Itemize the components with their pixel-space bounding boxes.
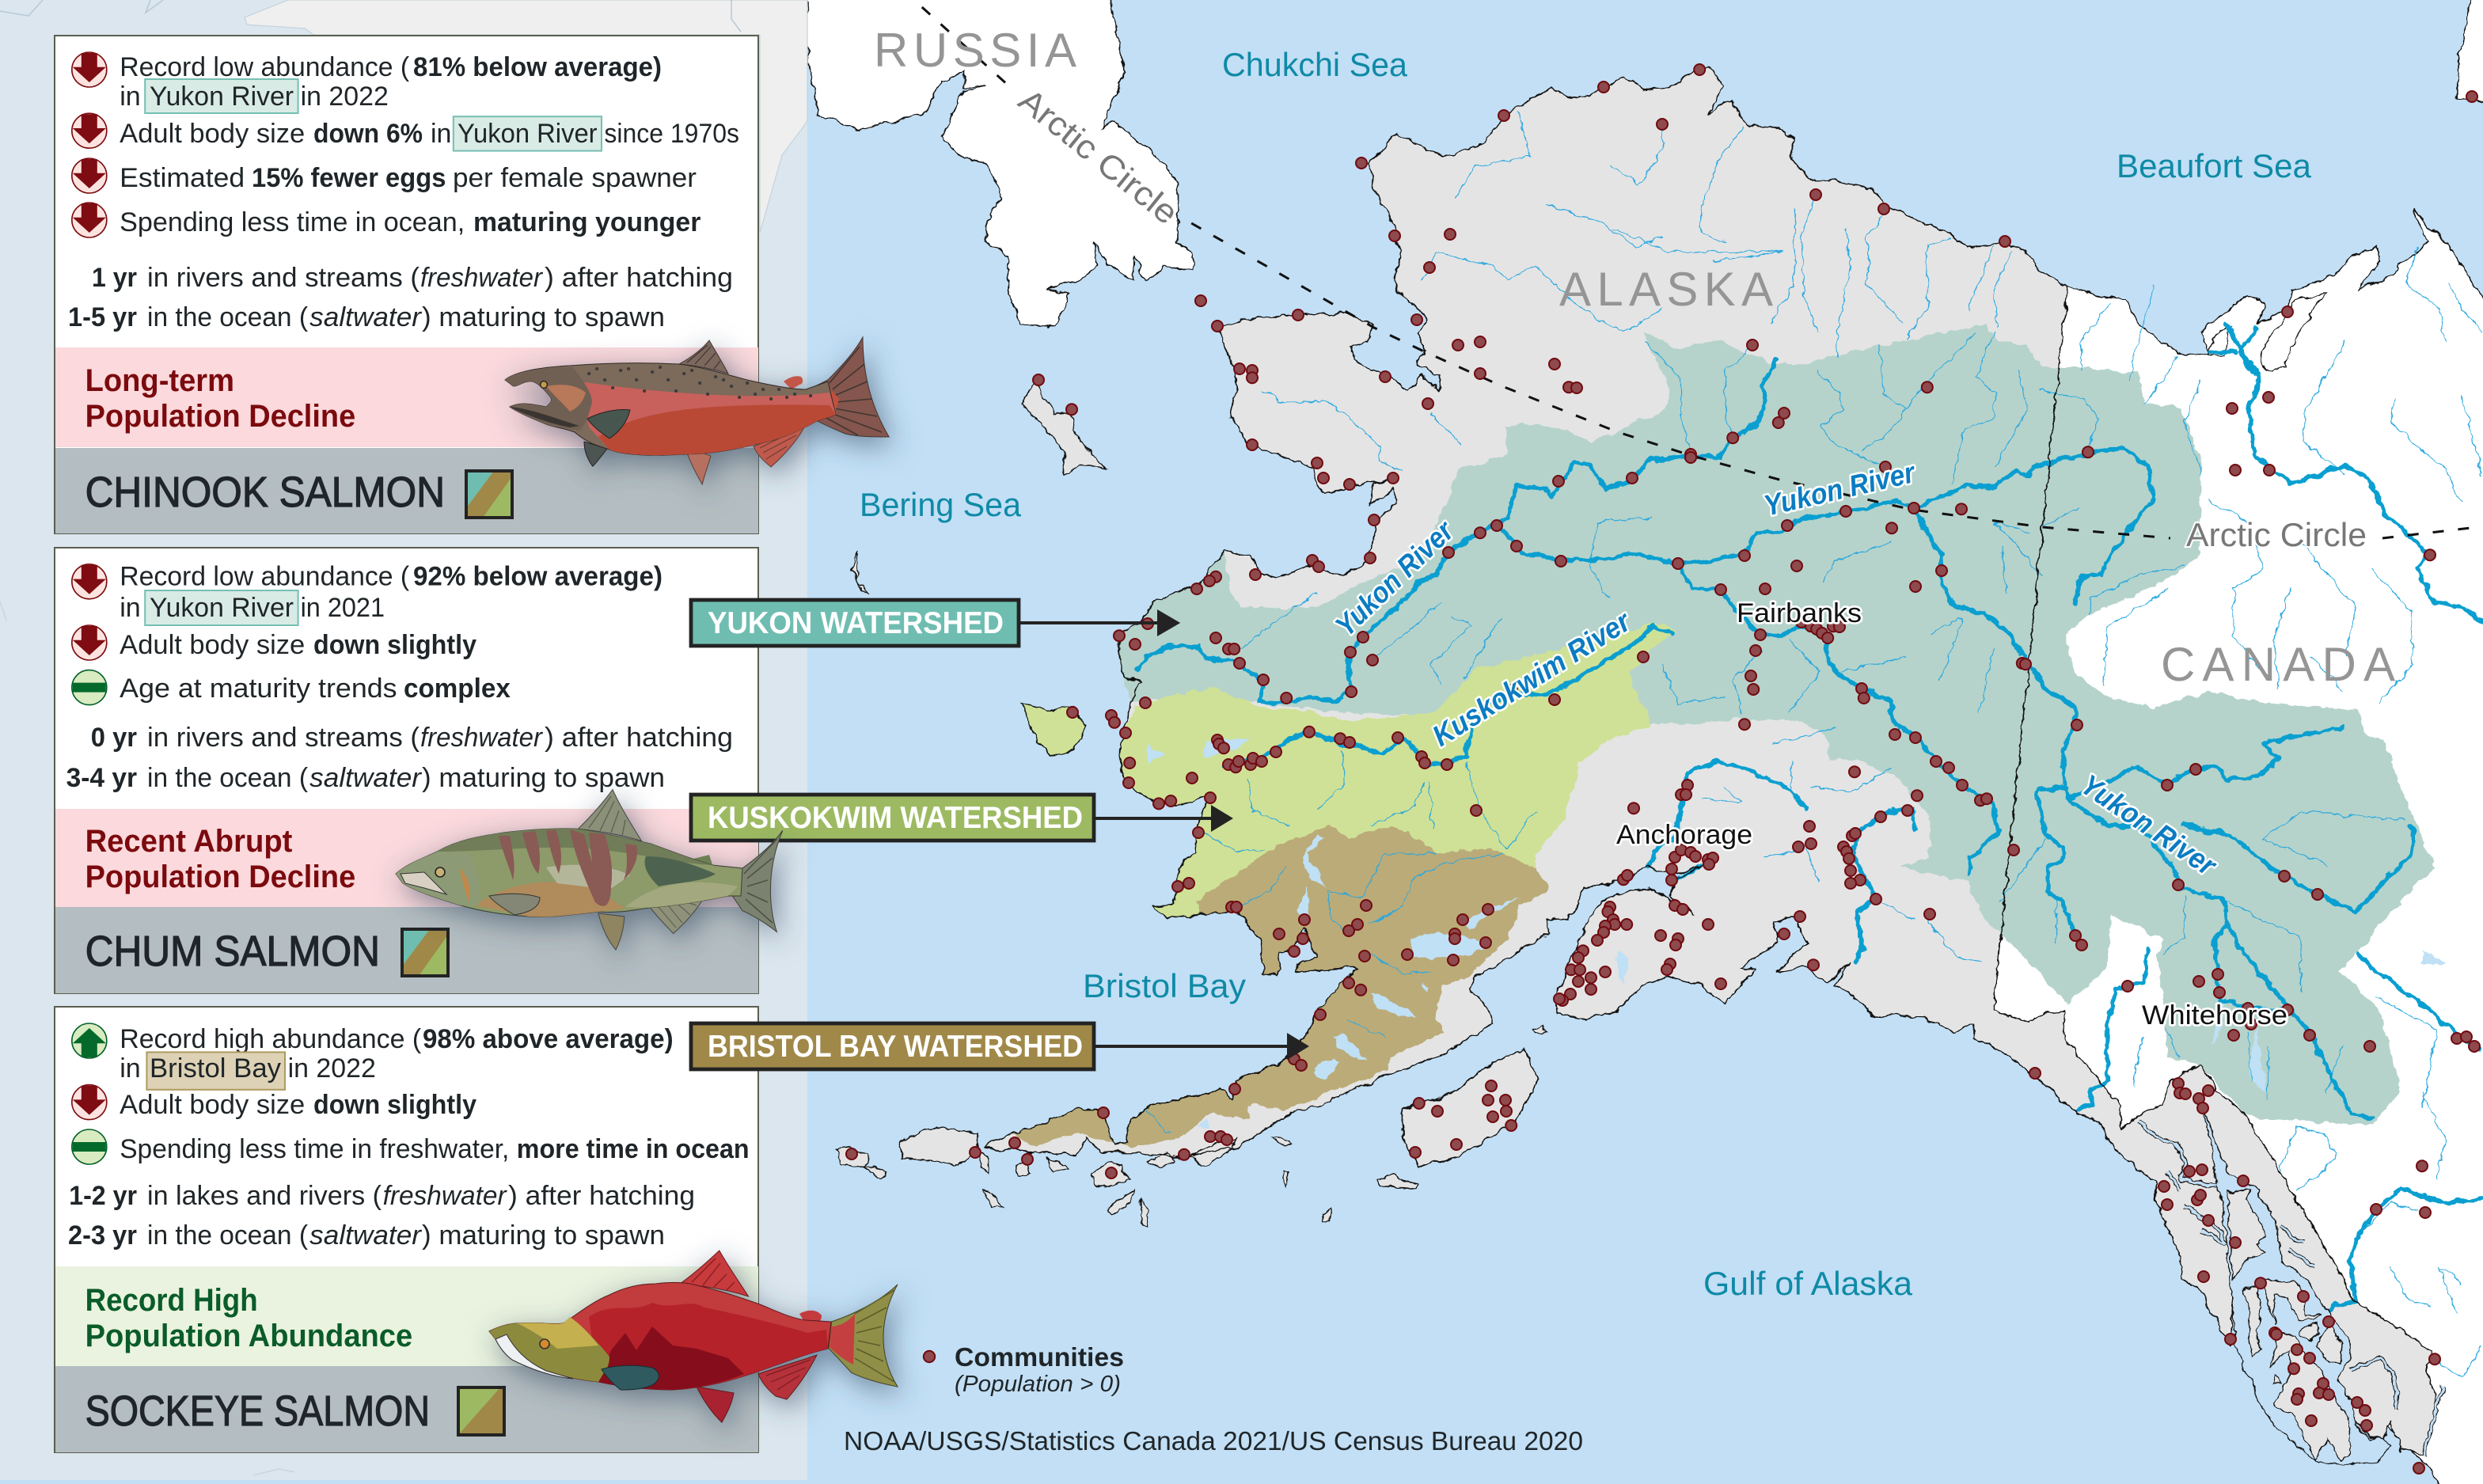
Panhandle narrow channels [2139, 1122, 2443, 1456]
Panhandle islands [2227, 1190, 2351, 1461]
name band [55, 448, 758, 533]
map: land and watersheds [807, 0, 2483, 1484]
text: life history: 3-4 yr [66, 763, 137, 793]
island: Trinity [1377, 1175, 1418, 1189]
text: abundance: Yukon River [150, 593, 294, 623]
text: body size: down slightly [313, 1090, 476, 1120]
text: abundance [120, 52, 662, 113]
text: life history: freshwater [383, 1181, 507, 1211]
text: body size: Adult body size [120, 119, 305, 149]
text: life history: in the ocean ( [147, 1220, 309, 1251]
text: life history: freshwater [420, 723, 544, 753]
label: Yukon watershed: YUKON WATERSHED [708, 606, 1004, 640]
text: life history: in the ocean ( [147, 763, 309, 793]
text: abundance: Record low abundance ( [120, 52, 410, 82]
label: Yukon River upper: Yukon River [2075, 769, 2223, 883]
text: life history: 1 yr [92, 263, 137, 293]
text: body size: in [431, 119, 451, 149]
head [489, 1317, 609, 1382]
label: Bristol Bay watershed: BRISTOL BAY WATERSHED [708, 1030, 1083, 1064]
rivers: Susitna and Copper [1648, 761, 1915, 961]
arrow: Yukon watershed [1019, 609, 1180, 636]
pelvic fin [685, 446, 711, 484]
text: life history: saltwater [309, 763, 423, 793]
text: body size: down slightly [313, 630, 476, 660]
status band: record high [55, 1266, 758, 1366]
label: Canada: CANADA [2161, 638, 2395, 691]
text: life history: 2-3 yr [68, 1220, 137, 1251]
icon: down arrow [72, 158, 107, 193]
fish: Sockeye salmon [489, 1251, 898, 1422]
lakes [1148, 738, 2446, 1130]
Arctic Circle dashed line [922, 7, 2483, 538]
text: abundance: in 2022 [288, 1053, 376, 1084]
label: Russia: RUSSIA [874, 24, 1076, 77]
icon: down arrow [72, 113, 107, 148]
body [396, 829, 742, 917]
text: life history: in the ocean ( [147, 302, 309, 332]
text: life history: freshwater [420, 263, 544, 293]
Alaska coastline [983, 66, 2436, 1461]
label: Kuskokwim watershed [691, 795, 1094, 841]
text: abundance: Yukon River [150, 82, 294, 112]
label: Chukchi Sea: Chukchi Sea [1222, 46, 1408, 83]
text: eggs [120, 163, 697, 193]
species name: SOCKEYE SALMON [85, 1387, 430, 1435]
Yukon watershed [1119, 325, 2435, 1124]
adipose fin [690, 855, 712, 864]
legend: communities: (Population > 0) [955, 1372, 1121, 1397]
text: body size: since 1970s [604, 119, 739, 149]
label: Kuskokwim watershed: KUSKOKWIM WATERSHED [708, 801, 1083, 835]
text: abundance: Record high abundance ( [120, 1024, 422, 1054]
status text: Population Decline [85, 860, 355, 894]
source credit: NOAA/USGS/Statistics Canada 2021/US Census Bureau 2020 [844, 1426, 1583, 1456]
rivers: Canada [2079, 323, 2483, 1312]
text: life history: saltwater [309, 1220, 423, 1251]
text: life history: ) after hatching [508, 1181, 695, 1211]
text: time in ocean: more time in ocean [517, 1134, 750, 1164]
text: maturity [120, 674, 511, 704]
anal fin [651, 895, 705, 933]
panel: Sockeye salmon [55, 1007, 758, 1452]
legend: communities: Communities [955, 1342, 1124, 1372]
head [505, 367, 592, 431]
status text: Recent Abrupt [85, 824, 292, 859]
flank patch [546, 865, 630, 890]
text: body size: down 6% [313, 119, 423, 149]
label: Arctic Circle along dashed line west: Arctic Circle [1012, 81, 1186, 232]
text: life history: 1-5 yr [68, 302, 137, 332]
rear dark patch [645, 856, 716, 886]
river: Yukon main stem [1136, 448, 2154, 702]
text: life history: in lakes and rivers ( [147, 1181, 382, 1211]
island: St Lawrence [1022, 380, 1105, 475]
status text: Record High [85, 1283, 258, 1318]
legend swatch: watersheds [458, 1387, 504, 1435]
legend swatch: watersheds [402, 929, 448, 976]
label: Beaufort Sea: Beaufort Sea [2117, 147, 2312, 184]
islands: Aleutian chain and Shumagin [836, 1024, 1547, 1227]
label: Anchorage: Anchorage [1616, 820, 1752, 850]
text: abundance: in 2021 [301, 593, 385, 623]
text: maturing [120, 207, 700, 237]
text: life history: in rivers and streams ( [147, 263, 420, 293]
name band [55, 1366, 758, 1452]
text: body size: Adult body size [120, 630, 305, 660]
island: St Matthew [852, 551, 869, 594]
text: life history: ) maturing to spawn [422, 1220, 665, 1251]
river: Tanana [1679, 564, 1999, 873]
dorsal fin [679, 340, 728, 374]
text: life history: ) maturing to spawn [422, 763, 665, 793]
label: Kuskokwim River: Kuskokwim River [1427, 604, 1638, 753]
ventral dark fin [584, 442, 607, 466]
text: abundance: in [120, 593, 141, 623]
species name: CHINOOK SALMON [85, 469, 445, 516]
panel: Chum salmon [55, 548, 758, 993]
tail [806, 337, 889, 437]
text: abundance: 98% above average) [423, 1024, 674, 1054]
status text: Population Decline [85, 399, 355, 434]
text: eggs: Estimated [120, 163, 245, 193]
text: eggs: 15% fewer eggs [252, 163, 446, 193]
river: Koyukuk [1497, 359, 1776, 524]
text: abundance: 92% below average) [413, 561, 663, 591]
text: abundance: in [120, 1053, 141, 1084]
text: maturity: complex [404, 674, 511, 704]
text: time in ocean [120, 1134, 750, 1164]
label: Whitehorse: Whitehorse [2142, 1000, 2287, 1030]
land: Russia [807, 0, 1194, 328]
text: life history: in rivers and streams ( [147, 723, 420, 753]
land: Canada [1993, 209, 2483, 1484]
text: abundance: Bristol Bay [150, 1053, 281, 1084]
tail [728, 830, 783, 932]
icon: down arrow [72, 1085, 107, 1120]
text: body size [120, 1090, 476, 1120]
island: Unimak [899, 1127, 978, 1165]
icon: down arrow [72, 625, 107, 660]
Bristol Bay watershed [1011, 825, 1550, 1148]
label: Yukon River middle: Yukon River [1761, 456, 1919, 522]
status text [85, 824, 355, 894]
text: body size [120, 630, 476, 660]
text: abundance [120, 1024, 674, 1090]
river: upper Yukon [1914, 508, 2415, 1118]
body [505, 363, 836, 455]
pectoral fin [489, 894, 540, 915]
pelvic fin [697, 1387, 734, 1422]
label: Yukon watershed [691, 600, 1019, 646]
label: Yukon River lower: Yukon River [1329, 514, 1461, 643]
Kuskokwim watershed [1119, 621, 1676, 918]
text: abundance: in 2022 [301, 82, 389, 112]
back shading [437, 829, 714, 865]
status band: recent abrupt decline [55, 809, 758, 907]
mid flank [589, 1303, 828, 1390]
spots [589, 367, 811, 399]
dorsal fin [579, 790, 642, 841]
text: body size [120, 116, 739, 151]
status text: Population Abundance [85, 1319, 412, 1353]
text: life history: ) maturing to spawn [422, 302, 665, 332]
species name: CHUM SALMON [85, 928, 380, 975]
head [396, 852, 480, 905]
island: Kodiak [1403, 1048, 1539, 1167]
text: abundance [120, 561, 663, 625]
pelvic fin [598, 913, 625, 950]
arrow: Kuskokwim watershed [1095, 805, 1233, 832]
pectoral fin [602, 1365, 659, 1390]
text: maturity: Age at maturity trends [120, 674, 397, 704]
land: Russia far-east island [2457, 0, 2483, 101]
adipose fin [799, 1311, 822, 1326]
stripes [499, 829, 612, 906]
text: eggs: per female spawner [453, 163, 697, 193]
text: body size: Adult body size [120, 1090, 305, 1120]
belly [475, 882, 625, 917]
text: life history [68, 1181, 695, 1251]
fish: Chinook salmon [505, 337, 889, 484]
icon: down arrow [72, 564, 107, 599]
land: Alaska [983, 66, 2436, 1461]
arrow: Bristol Bay watershed [1095, 1033, 1309, 1060]
Panhandle inside passage water [2204, 1113, 2390, 1464]
flank [579, 381, 836, 455]
text: abundance: Record low abundance ( [120, 561, 410, 591]
status text [85, 363, 355, 434]
legend swatch: watersheds [466, 471, 512, 518]
label: Bristol Bay: Bristol Bay [1083, 967, 1246, 1004]
label: Bristol Bay watershed [691, 1023, 1094, 1069]
icon: neutral bar [72, 670, 107, 705]
status band: long-term decline [55, 347, 758, 447]
pectoral fin [587, 409, 630, 438]
communities: dots [846, 64, 2480, 1474]
label: Fairbanks: Fairbanks [1737, 598, 1862, 628]
label: Arctic Circle east: Arctic Circle [2186, 516, 2367, 553]
text: maturing: Spending less time in ocean, [120, 207, 465, 237]
text: maturing: maturing younger [473, 207, 700, 237]
river network: small tributaries [1147, 114, 2482, 1377]
text: life history: 0 yr [91, 723, 137, 753]
label: Alaska: ALASKA [1559, 263, 1773, 316]
island: Nunivak [1022, 702, 1086, 754]
left strip background [0, 0, 807, 1480]
text: life history: ) after hatching [545, 723, 733, 753]
text: abundance: 81% below average) [413, 52, 662, 82]
text: life history [68, 263, 733, 332]
status text: Long-term [85, 363, 234, 398]
icon: down arrow [72, 52, 107, 87]
Mackenzie delta islands [2208, 293, 2327, 370]
US-Canada border [1993, 287, 2067, 1010]
text: life history: 1-2 yr [69, 1181, 137, 1211]
icon: neutral bar [72, 1129, 107, 1164]
dorsal fin [679, 1251, 749, 1296]
text: life history [66, 723, 733, 793]
text: life history: saltwater [309, 302, 423, 332]
text: body size: Yukon River [457, 119, 598, 149]
text: life history: ) after hatching [545, 263, 733, 293]
anal fin [754, 424, 806, 467]
text: abundance: in [120, 82, 141, 112]
icon: up arrow [72, 1023, 107, 1058]
anal fin [758, 1355, 817, 1399]
body [489, 1282, 831, 1390]
tail [829, 1285, 898, 1387]
status text [85, 1283, 412, 1353]
name band [55, 907, 758, 993]
fish: Chum salmon [396, 790, 783, 950]
legend: communities [924, 1342, 1124, 1397]
label: Bering Sea: Bering Sea [860, 486, 1022, 523]
adipose fin [784, 376, 803, 389]
text: time in ocean: Spending less time in freshwater, [120, 1134, 509, 1164]
icon: down arrow [72, 203, 107, 237]
river: Kuskokwim [1224, 626, 1673, 768]
dark belly [598, 1326, 744, 1390]
panel: Chinook salmon [55, 36, 758, 533]
label: Gulf of Alaska: Gulf of Alaska [1703, 1265, 1913, 1302]
